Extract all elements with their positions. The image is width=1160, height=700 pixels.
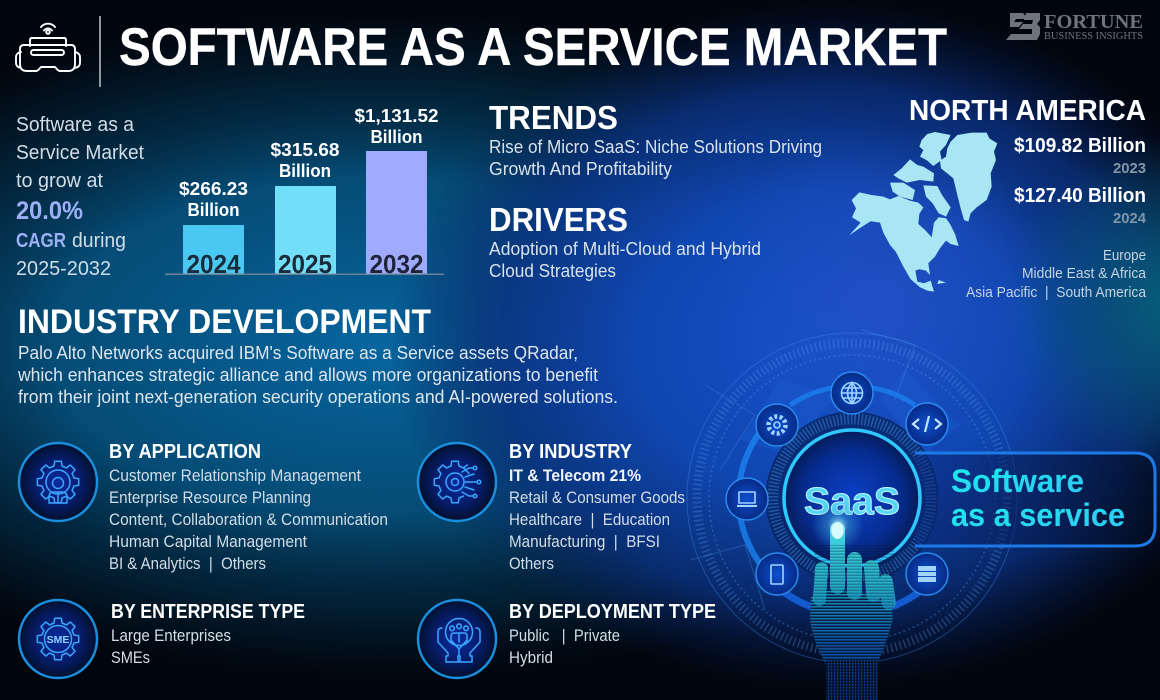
text block: trends: Rise of Micro SaaS: Niche Solutions Driving — [489, 137, 822, 157]
bar 2025 — [270, 140, 340, 279]
bar 2025: 2025 — [278, 249, 332, 279]
bar 2032: 2032 — [370, 249, 424, 279]
central SaaS button — [784, 430, 920, 566]
central SaaS button: SaaS — [804, 481, 900, 523]
text block: CAGR summary: to grow at — [16, 170, 103, 192]
text block: North America stats: 2024 — [1113, 210, 1147, 227]
panel: by application: Content, Collaboration & Communication — [109, 510, 388, 529]
bar 2025: Billion — [279, 161, 331, 181]
panel: by industry: IT & Telecom 21% — [509, 466, 641, 485]
panel: by application — [19, 441, 388, 573]
divider — [99, 16, 101, 87]
text block: trends: TRENDS — [489, 99, 618, 136]
icon: code — [906, 403, 948, 445]
panel: by application: Enterprise Resource Planning — [109, 488, 311, 507]
bar 2024: Billion — [188, 200, 240, 220]
panel: by enterprise type: Large Enterprises — [111, 626, 231, 645]
icon: SME gear: SME — [47, 634, 69, 646]
text block: CAGR summary — [16, 114, 144, 280]
map: North America — [849, 132, 997, 292]
icon: phone — [756, 553, 798, 595]
bar 2024: 2024 — [186, 249, 241, 279]
text block: CAGR summary: CAGR — [16, 230, 66, 252]
text block: trends: Growth And Profitability — [489, 159, 672, 179]
panel: by deployment type: Hybrid — [509, 648, 553, 667]
icon: gear with person — [19, 443, 97, 521]
icon: hands holding people — [418, 600, 496, 678]
text block: industry development: which enhances strategic alliance and allows more organizations to benefit — [17, 365, 598, 385]
text block: North America stats — [909, 95, 1147, 301]
panel: by industry: Retail & Consumer Goods — [509, 488, 685, 507]
text block: CAGR summary: Software as a — [16, 114, 135, 136]
panel: by enterprise type: SMEs — [111, 648, 150, 667]
text block: CAGR summary: 20.0% — [16, 197, 83, 225]
text block: trends — [489, 99, 822, 179]
bar chart: market size — [165, 106, 444, 279]
icon: server — [906, 553, 948, 595]
callout: software as a service: as a service — [951, 497, 1125, 533]
panel: by deployment type: BY DEPLOYMENT TYPE — [509, 601, 716, 623]
text block: industry development: Palo Alto Networks acquired IBM's Software as a Service assets QRadar, — [18, 343, 578, 363]
icon: gear with circuit — [418, 443, 496, 521]
callout: software as a service: Software — [951, 463, 1084, 499]
title: SOFTWARE AS A SERVICE MARKET — [119, 18, 947, 77]
icon: SME gear — [19, 600, 97, 678]
panel: by application: BY APPLICATION — [109, 441, 261, 463]
text block: North America stats: NORTH AMERICA — [909, 95, 1146, 127]
panel: by deployment type: Public | Private — [509, 626, 620, 645]
panel: by industry: BY INDUSTRY — [509, 441, 633, 463]
callout: software as a service — [915, 453, 1155, 546]
text block: drivers: Adoption of Multi-Cloud and Hybrid — [489, 239, 761, 259]
text block: drivers: DRIVERS — [489, 201, 628, 238]
text block: drivers — [489, 201, 761, 281]
text block: North America stats: Asia Pacific | South America — [966, 285, 1147, 301]
bar 2032: Billion — [370, 127, 422, 147]
icon: laptop — [726, 478, 768, 520]
text block: North America stats: $109.82 Billion — [1014, 135, 1146, 157]
text block: industry development: from their joint next-generation security operations and AI-powered solutions. — [18, 387, 618, 407]
panel: by enterprise type: BY ENTERPRISE TYPE — [111, 601, 305, 623]
bar 2025: $315.68 — [270, 140, 340, 160]
panel: by enterprise type — [19, 600, 305, 678]
text block: industry development — [17, 303, 618, 407]
text block: North America stats: 2023 — [1113, 160, 1146, 177]
logo: Fortune Business Insights — [1006, 11, 1143, 42]
text block: North America stats: Europe — [1103, 248, 1146, 264]
bar 2032 — [354, 106, 438, 279]
bar 2032: $1,131.52 — [354, 106, 438, 126]
illustration: robotic hand — [810, 499, 897, 700]
logo: Fortune Business Insights: FORTUNE — [1044, 11, 1143, 33]
panel: by application: BI & Analytics | Others — [109, 554, 266, 573]
bar 2024 — [179, 179, 248, 279]
panel: by industry: Others — [509, 554, 554, 573]
text block: North America stats: $127.40 Billion — [1014, 185, 1146, 207]
panel: by industry: Healthcare | Education — [509, 510, 670, 529]
panel: by application: Customer Relationship Management — [109, 466, 361, 485]
icon: globe — [831, 372, 873, 414]
panel: by industry — [418, 441, 685, 573]
text block: CAGR summary: 2025-2032 — [16, 258, 111, 280]
icon: VR headset with wifi — [16, 24, 80, 71]
logo: Fortune Business Insights: BUSINESS INSIGHTS — [1044, 31, 1143, 42]
bar 2024: $266.23 — [179, 179, 248, 199]
text block: industry development: INDUSTRY DEVELOPMENT — [18, 303, 431, 341]
panel: by deployment type — [418, 600, 716, 678]
text block: CAGR summary: Service Market — [16, 142, 144, 164]
illustration: SaaS dial — [687, 330, 1155, 700]
text block: North America stats: Middle East & Africa — [1022, 266, 1147, 282]
decorative rings — [687, 330, 1017, 663]
text block: drivers: Cloud Strategies — [489, 261, 616, 281]
text block: CAGR summary: during — [72, 230, 126, 252]
icon: gear — [756, 404, 798, 446]
panel: by application: Human Capital Management — [109, 532, 307, 551]
panel: by industry: Manufacturing | BFSI — [509, 532, 660, 551]
